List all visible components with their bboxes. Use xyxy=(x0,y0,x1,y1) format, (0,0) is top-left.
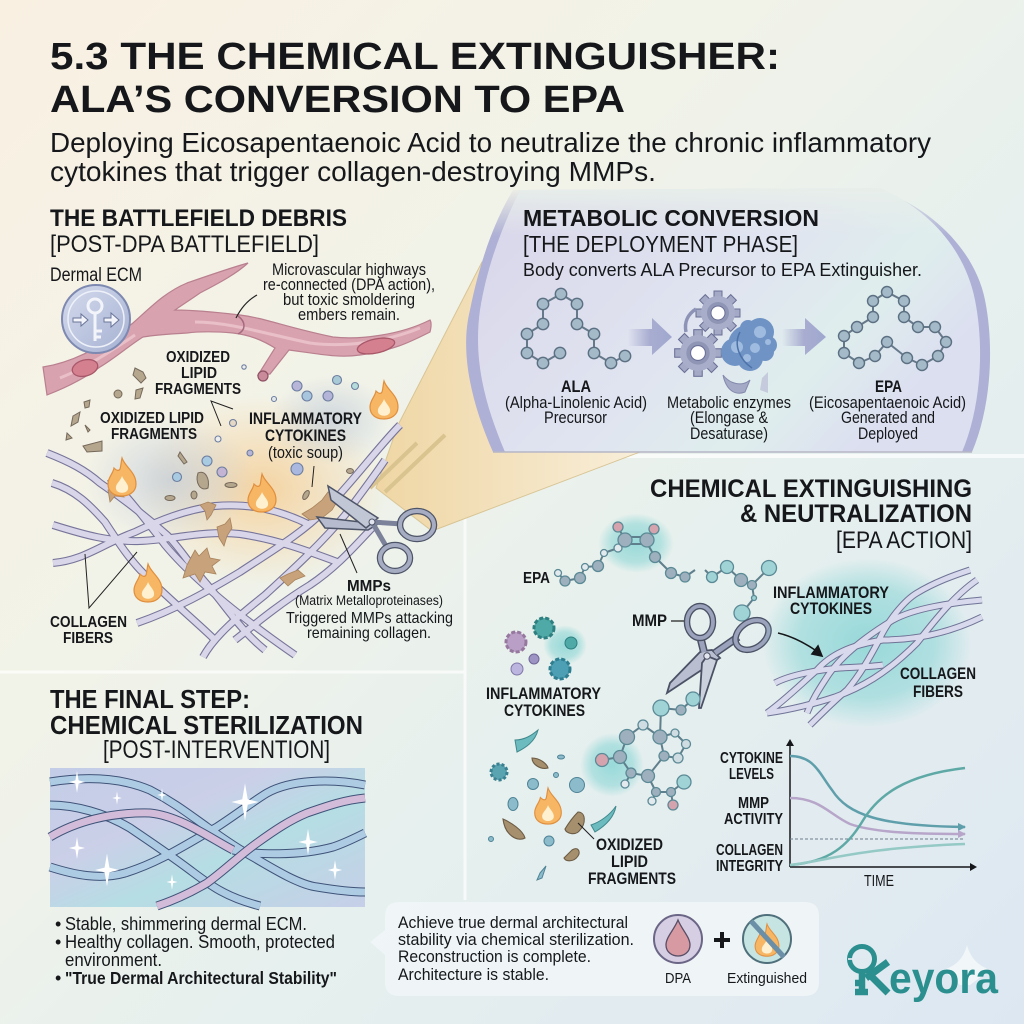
illustration: toxic glow xyxy=(85,375,390,585)
label: EPA: EPA xyxy=(875,378,902,396)
label: oxidized lipid fragments upper: OXIDIZED xyxy=(166,349,230,366)
panel: metabolic conversion xyxy=(466,188,990,452)
line chart: ACTIVITY xyxy=(724,811,783,828)
label: oxidized lipid fragments upper xyxy=(155,349,241,426)
subtitle: Deploying Eicosapentaenoic Acid to neutralize the chronic inflammatory xyxy=(50,127,931,158)
label: oxidized lipid fragments lower: FRAGMENTS xyxy=(111,426,197,443)
callout: summary: Architecture is stable. xyxy=(398,965,549,984)
label: inflammatory cytokines: INFLAMMATORY xyxy=(486,684,602,703)
label: ALA: Precursor xyxy=(544,409,607,427)
text: bullet list: • xyxy=(55,932,61,952)
label: dermal ECM: Dermal ECM xyxy=(50,265,142,286)
label: metabolic enzymes xyxy=(667,394,791,443)
label: collagen fibers xyxy=(50,552,137,647)
molecule: ALA xyxy=(521,288,631,369)
molecule: bottom ring structure xyxy=(580,692,700,810)
label: MMPs: MMPs xyxy=(347,578,391,595)
heading: battlefield debris: THE BATTLEFIELD DEBRIS xyxy=(50,205,347,232)
text: bullet list: "True Dermal Architectural Stability" xyxy=(65,968,337,988)
logo: Keyora xyxy=(848,945,998,1003)
icon: plus xyxy=(714,932,730,948)
label: inflammatory cytokines xyxy=(249,410,362,487)
heading: metabolic conversion xyxy=(523,205,922,280)
label: inflammatory cytokines: CYTOKINES xyxy=(265,427,346,445)
label: ALA xyxy=(505,378,647,427)
arrow: ALA to enzymes xyxy=(628,318,672,355)
heading: chemical extinguishing: CHEMICAL EXTINGUISHING xyxy=(650,475,972,503)
text: microvascular note: but toxic smoldering xyxy=(283,291,415,309)
text: microvascular note: Microvascular highways xyxy=(272,261,426,279)
dome panel shape xyxy=(466,188,990,452)
callout: summary xyxy=(370,902,819,996)
label: EPA xyxy=(809,378,966,443)
callout: summary: stability via chemical sterilization. xyxy=(398,930,634,949)
label: collagen fibers xyxy=(900,664,976,701)
label: cytokines on bundle: CYTOKINES xyxy=(790,599,872,618)
label: MMPs: (Matrix Metalloproteinases) xyxy=(295,593,443,608)
panel: chemical extinguishing xyxy=(486,475,982,890)
label: oxidized lipid fragments lower: OXIDIZED LIPID xyxy=(100,410,204,427)
illustration: collagen bundle xyxy=(762,558,982,728)
label: collagen fibers: FIBERS xyxy=(913,682,963,701)
icon: flames xyxy=(108,381,398,602)
heading: chemical extinguishing: & NEUTRALIZATION xyxy=(740,500,972,528)
illustration: cytokine particles xyxy=(172,365,358,482)
label: cytokines on bundle: INFLAMMATORY xyxy=(773,583,890,602)
line chart xyxy=(716,739,977,890)
label: EPA: EPA xyxy=(523,570,550,587)
icon: MMP scissors xyxy=(317,486,434,571)
label: inflammatory cytokines: INFLAMMATORY xyxy=(249,410,362,428)
arrow: enzymes to EPA xyxy=(782,318,826,355)
title: 5.3 THE CHEMICAL EXTINGUISHER: xyxy=(50,36,780,78)
heading: metabolic conversion: METABOLIC CONVERSION xyxy=(523,205,819,231)
title xyxy=(50,36,780,121)
label: oxidized lipid fragments upper: FRAGMENTS xyxy=(155,381,241,398)
heading: metabolic conversion: Body converts ALA Precursor to EPA Extinguisher. xyxy=(523,259,922,280)
label: MMP: MMP xyxy=(632,612,667,630)
text: bullet list: • xyxy=(55,914,61,934)
text: microvascular note: re-connected (DPA action), xyxy=(263,276,435,294)
label: metabolic enzymes: Desaturase) xyxy=(690,425,768,443)
illustration: collagen fibers xyxy=(47,425,445,657)
line chart: INTEGRITY xyxy=(716,858,783,875)
icon: scissors xyxy=(667,606,774,708)
text: bullet list: Healthy collagen. Smooth, protected xyxy=(65,932,335,952)
label: inflammatory cytokines: CYTOKINES xyxy=(504,701,585,720)
illustration: inflammatory cytokines cluster xyxy=(506,618,587,679)
label: MMPs: remaining collagen. xyxy=(307,625,431,642)
label: ALA: (Alpha-Linolenic Acid) xyxy=(505,394,647,412)
heading: chemical extinguishing xyxy=(650,475,972,554)
label: MMP xyxy=(632,612,690,630)
label: oxidized lipid fragments: LIPID xyxy=(611,852,648,871)
molecule: EPA chain xyxy=(554,513,776,621)
icon: key badge xyxy=(62,285,130,353)
label: oxidized lipid fragments: OXIDIZED xyxy=(596,835,663,854)
icon: DPA drop xyxy=(654,915,702,987)
label: cytokines on bundle xyxy=(773,583,890,618)
label: EPA: (Eicosapentaenoic Acid) xyxy=(809,394,966,412)
label: collagen fibers: COLLAGEN xyxy=(50,614,127,631)
label: inflammatory cytokines: (toxic soup) xyxy=(268,444,343,462)
label: MMPs xyxy=(286,534,453,642)
line chart: TIME xyxy=(864,873,894,890)
text: microvascular note: embers remain. xyxy=(298,306,400,324)
text: bullet list: • xyxy=(55,968,61,988)
icon: gears and enzyme xyxy=(675,291,777,393)
label: oxidized lipid fragments lower xyxy=(100,410,204,443)
title: ALA’S CONVERSION TO EPA xyxy=(50,79,625,121)
callout: summary: Reconstruction is complete. xyxy=(398,947,591,966)
label: oxidized lipid fragments: FRAGMENTS xyxy=(588,869,676,888)
label: collagen fibers: FIBERS xyxy=(63,630,113,647)
heading: final step xyxy=(50,686,363,764)
panel: battlefield debris xyxy=(43,205,453,657)
icon: extinguished flame: Extinguished xyxy=(727,970,807,987)
label: ALA: ALA xyxy=(561,378,591,396)
icon: DPA drop: DPA xyxy=(665,970,691,987)
line chart: CYTOKINE xyxy=(720,750,783,767)
heading: chemical extinguishing: [EPA ACTION] xyxy=(836,527,972,554)
arrow: to collagen bundle xyxy=(778,633,822,656)
callout: summary: Achieve true dermal architectural xyxy=(398,913,628,932)
label: oxidized lipid fragments upper: LIPID xyxy=(181,365,217,382)
panel: final step xyxy=(50,686,365,988)
heading: metabolic conversion: [THE DEPLOYMENT PHASE] xyxy=(523,231,798,257)
line chart: LEVELS xyxy=(729,766,774,783)
text: bullet list xyxy=(55,914,337,988)
heading: final step: [POST-INTERVENTION] xyxy=(103,736,330,764)
heading: final step: THE FINAL STEP: xyxy=(50,686,250,714)
label: inflammatory cytokines xyxy=(486,684,602,720)
text: microvascular note xyxy=(236,261,435,324)
label: oxidized lipid fragments xyxy=(578,823,676,888)
illustration: lipid fragments xyxy=(66,368,354,501)
zoom cone from scissors to metabolic panel xyxy=(376,262,640,531)
heading: final step: CHEMICAL STERILIZATION xyxy=(50,712,363,740)
subtitle xyxy=(50,127,931,187)
logo: Keyora: eyora xyxy=(889,954,998,1003)
line chart: COLLAGEN xyxy=(716,842,783,859)
label: metabolic enzymes: Metabolic enzymes xyxy=(667,394,791,412)
subtitle: cytokines that trigger collagen-destroying MMPs. xyxy=(50,156,656,187)
heading: battlefield debris: [POST-DPA BATTLEFIELD] xyxy=(50,231,319,258)
label: EPA: Deployed xyxy=(858,425,918,443)
label: metabolic enzymes: (Elongase & xyxy=(690,409,768,427)
molecule: EPA xyxy=(838,286,952,370)
label: EPA: Generated and xyxy=(841,409,935,427)
illustration: neutralized debris xyxy=(488,730,616,880)
illustration: damage patches xyxy=(108,488,338,586)
label: MMPs: Triggered MMPs attacking xyxy=(286,610,453,627)
label: collagen fibers: COLLAGEN xyxy=(900,664,976,683)
text: bullet list: environment. xyxy=(65,950,162,970)
illustration: blood vessel xyxy=(43,263,431,395)
icon: extinguished flame xyxy=(727,915,807,987)
heading: battlefield debris xyxy=(50,205,347,258)
line chart: MMP xyxy=(738,795,769,812)
illustration: shimmering ECM xyxy=(50,768,365,907)
text: bullet list: Stable, shimmering dermal ECM. xyxy=(65,914,307,934)
